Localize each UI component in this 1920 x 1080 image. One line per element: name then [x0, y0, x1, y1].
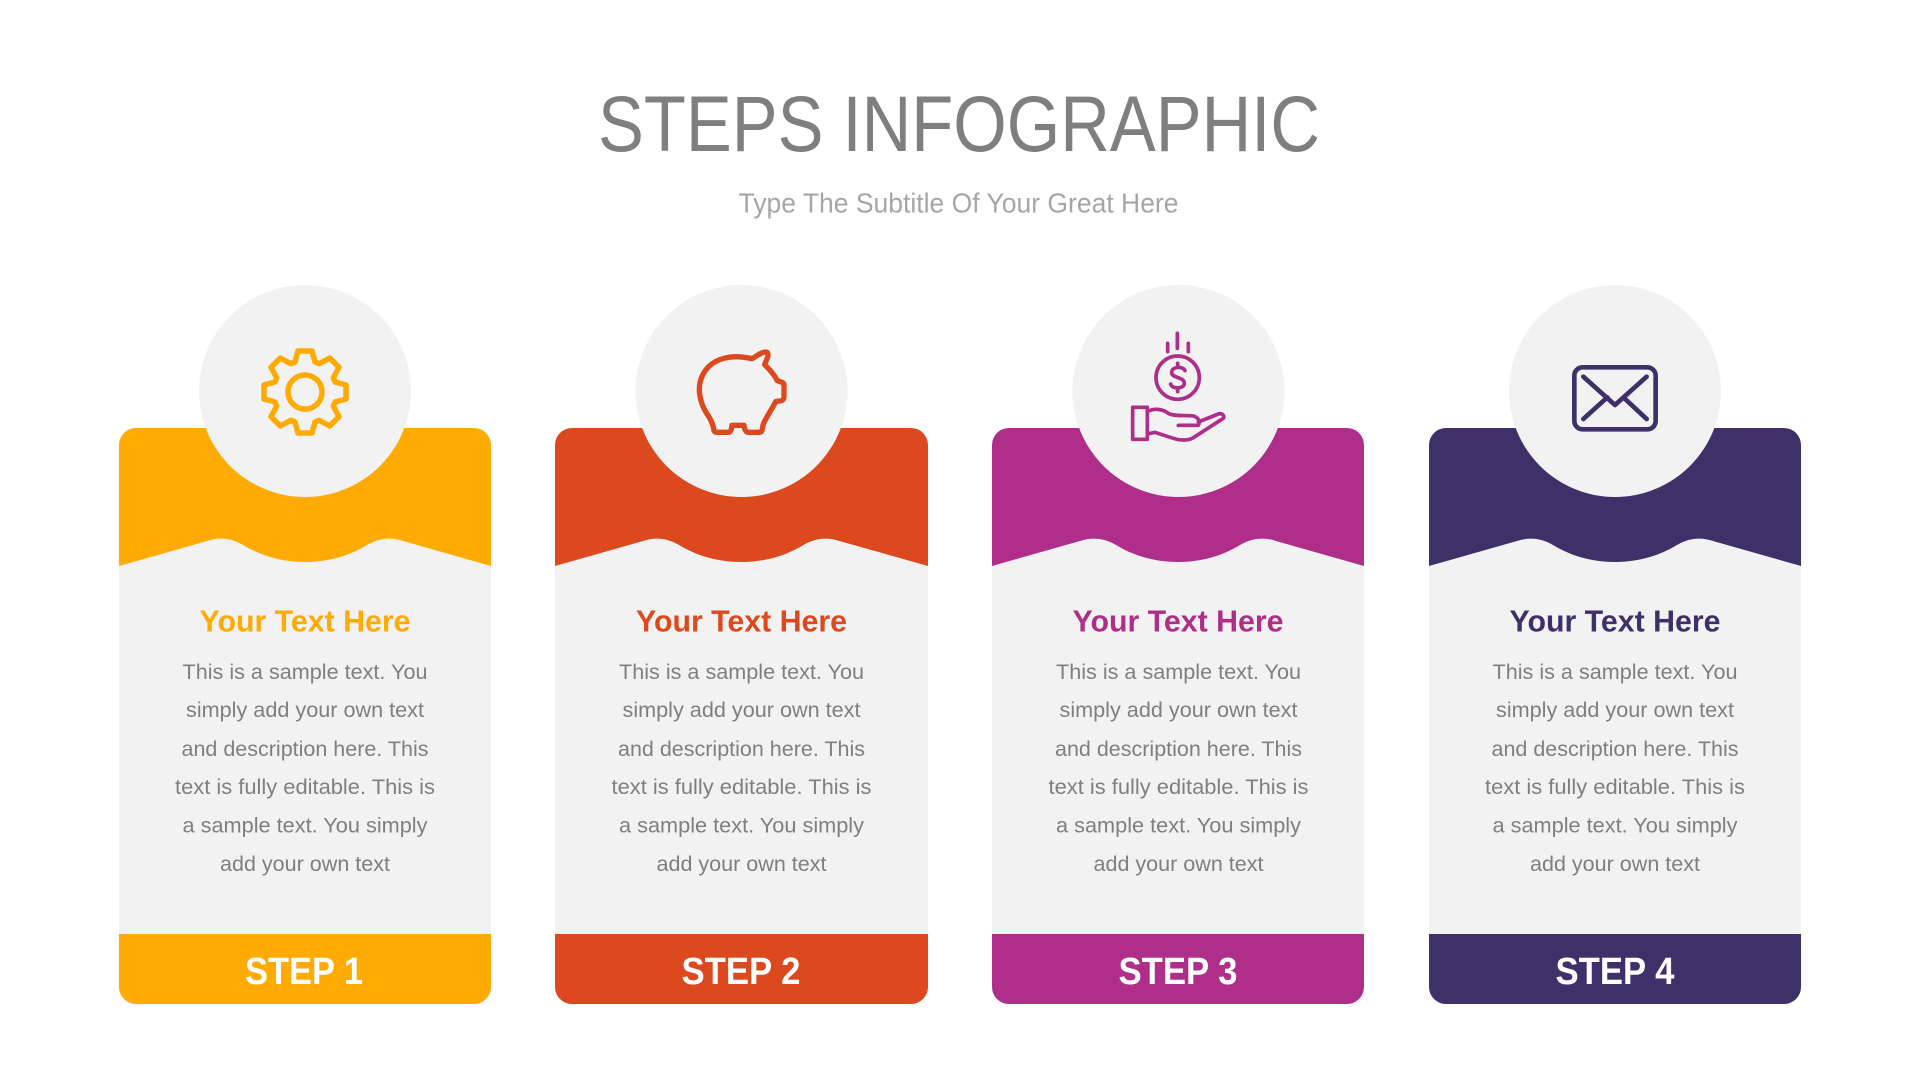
description: a sample text. You simply [619, 814, 864, 838]
description: text is fully editable. This is [1048, 775, 1308, 799]
description [1048, 660, 1308, 876]
description: simply add your own text [622, 698, 861, 722]
step bar [1429, 934, 1801, 1004]
card body [119, 428, 491, 1004]
description: add your own text [220, 852, 390, 876]
step bar [555, 934, 928, 1004]
step label: STEP 3 [1118, 951, 1238, 993]
card body [992, 428, 1364, 1004]
icon: envelope [1574, 367, 1656, 429]
panel: step 1 [119, 285, 491, 1004]
icon: piggy bank [699, 352, 784, 432]
panel: step 3 [992, 285, 1364, 1004]
step label: STEP 4 [1556, 951, 1674, 993]
title: STEPS INFOGRAPHIC [598, 79, 1320, 168]
description: and description here. This [1492, 737, 1738, 761]
step bar [119, 934, 491, 1004]
description: simply add your own text [1496, 698, 1734, 722]
description: add your own text [1530, 852, 1700, 876]
panel: step 4 [1429, 285, 1801, 1004]
card body [555, 428, 928, 1004]
step label: STEP 1 [245, 951, 363, 993]
description: and description here. This [618, 737, 865, 761]
icon circle [1072, 285, 1284, 497]
step bar [992, 934, 1364, 1004]
description: text is fully editable. This is [175, 775, 435, 799]
description: This is a sample text. You [1492, 660, 1738, 684]
panel: step 2 [555, 285, 928, 1004]
description: a sample text. You simply [182, 814, 428, 838]
description [175, 660, 435, 876]
heading: Your Text Here [636, 604, 847, 638]
description: add your own text [656, 852, 827, 876]
description [612, 660, 872, 876]
description: a sample text. You simply [1492, 814, 1738, 838]
coloured header with wave [555, 428, 928, 566]
description: a sample text. You simply [1056, 814, 1301, 838]
description: This is a sample text. You [619, 660, 864, 684]
icon circle [636, 285, 848, 497]
description: simply add your own text [186, 698, 424, 722]
icon circle [199, 285, 411, 497]
description: simply add your own text [1060, 698, 1298, 722]
step label: STEP 2 [682, 951, 800, 993]
icon: gear [264, 351, 346, 433]
coloured header with wave [992, 428, 1364, 566]
coloured header with wave [119, 428, 491, 566]
icon: coin over hand [1133, 333, 1224, 440]
icon circle [1509, 285, 1721, 497]
description: This is a sample text. You [1056, 660, 1301, 684]
subtitle: Type The Subtitle Of Your Great Here [738, 188, 1178, 218]
heading: Your Text Here [200, 604, 410, 638]
description: and description here. This [182, 737, 428, 761]
coloured header with wave [1429, 428, 1801, 566]
card body [1429, 428, 1801, 1004]
description: and description here. This [1055, 737, 1302, 761]
description: This is a sample text. You [182, 660, 428, 684]
description [1485, 660, 1745, 876]
description: add your own text [1094, 852, 1264, 876]
heading: Your Text Here [1510, 604, 1720, 638]
description: text is fully editable. This is [612, 775, 872, 799]
description: text is fully editable. This is [1485, 775, 1745, 799]
heading: Your Text Here [1072, 604, 1284, 638]
